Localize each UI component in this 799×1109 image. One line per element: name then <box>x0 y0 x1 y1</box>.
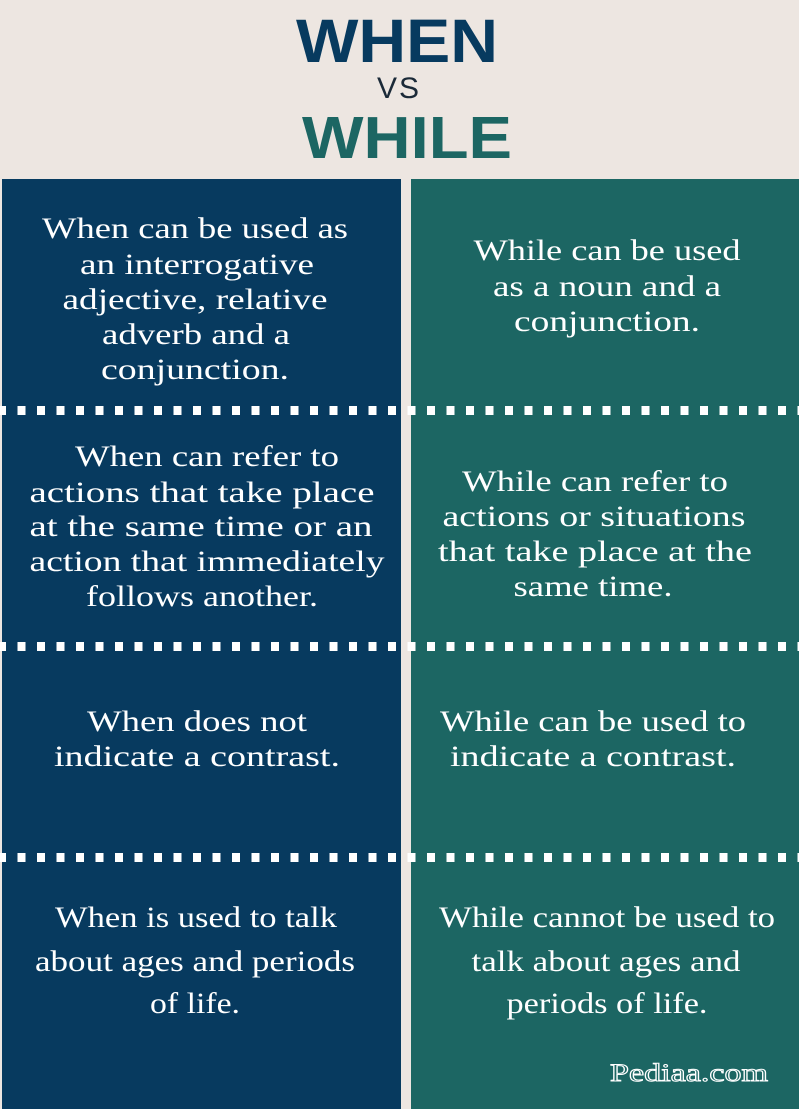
text: while column: periods of life. <box>506 987 708 1020</box>
text: when column: adverb and a <box>102 318 290 351</box>
text: while column: same time. <box>514 570 672 603</box>
panel: when <box>2 179 401 1109</box>
text: when column: of life. <box>150 987 240 1020</box>
text: when column: about ages and periods <box>35 945 355 978</box>
text: while column: While cannot be used to <box>439 901 775 934</box>
text: while column: talk about ages and <box>472 945 740 978</box>
text: while column <box>438 234 775 1020</box>
text: when column: When is used to talk <box>55 901 337 934</box>
title <box>296 7 512 171</box>
text: when column: indicate a contrast. <box>54 740 340 773</box>
text: when column: actions that take place <box>30 476 374 509</box>
panel: while <box>411 179 799 1109</box>
text: while column: that take place at the <box>438 535 752 568</box>
text: when column: When can refer to <box>75 440 339 473</box>
text: while column: indicate a contrast. <box>450 740 736 773</box>
title: WHILE <box>302 105 512 171</box>
logo: Pediaa.com: Pediaa.com <box>610 1060 769 1087</box>
text: while column: actions or situations <box>442 500 746 533</box>
text: while column: as a noun and a <box>493 270 721 303</box>
text: when column: adjective, relative <box>62 283 328 316</box>
text: when column: When does not <box>87 705 308 738</box>
text: while column: While can be used to <box>440 705 746 738</box>
title: WHEN <box>296 7 498 75</box>
text: when column: action that immediately <box>30 545 384 578</box>
text: while column: While can be used <box>474 234 740 267</box>
dividers <box>0 406 799 862</box>
text: when column: follows another. <box>86 580 318 613</box>
text: when column: at the same time or an <box>30 510 372 543</box>
text: when column <box>30 212 384 1020</box>
title: VS <box>377 72 427 105</box>
text: while column: conjunction. <box>514 305 700 338</box>
text: while column: While can refer to <box>462 465 728 498</box>
text: when column: conjunction. <box>101 353 289 386</box>
text: when column: When can be used as <box>42 212 348 245</box>
text: when column: an interrogative <box>80 248 314 281</box>
